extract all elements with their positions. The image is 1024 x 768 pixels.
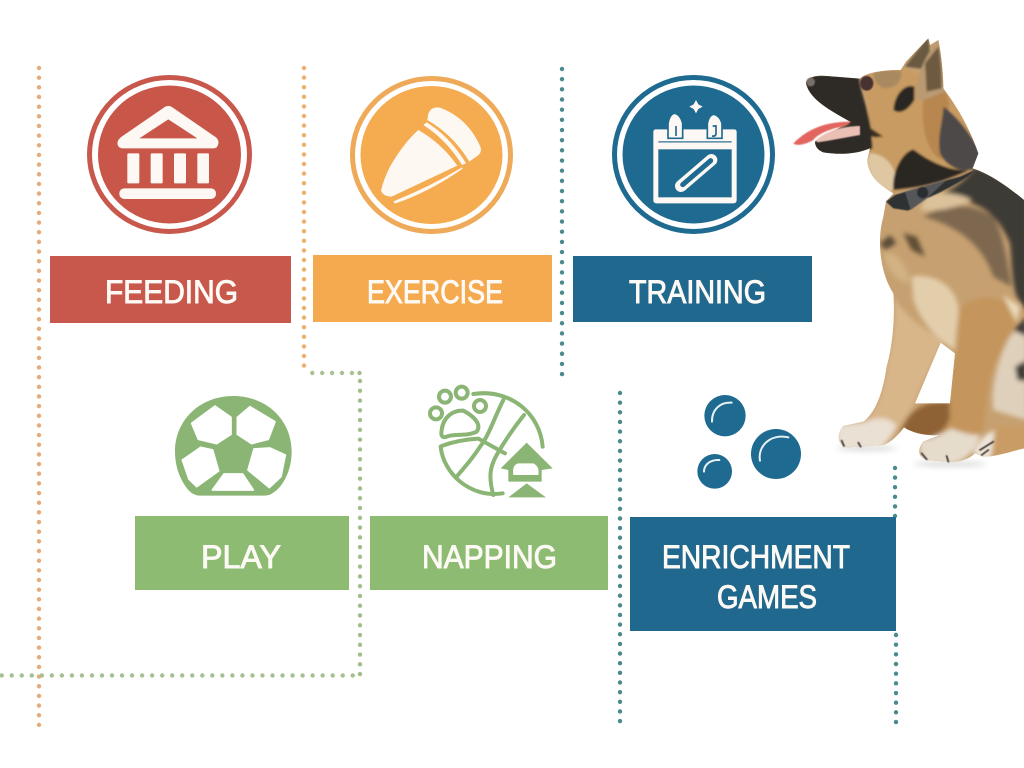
panel: enrichment games label: GAMES — [717, 579, 817, 615]
panel: napping label: NAPPING — [422, 539, 557, 575]
panel: training label: TRAINING — [629, 274, 766, 310]
panel: exercise label — [313, 255, 552, 322]
icon: exercise wedge badge — [352, 78, 510, 232]
panel: play label: PLAY — [201, 539, 281, 575]
panel: enrichment games label — [630, 517, 896, 631]
icon: training calendar badge — [614, 78, 772, 232]
icon: play soccer ball — [175, 396, 292, 496]
panel: feeding label — [50, 256, 291, 323]
panel: napping label — [370, 516, 608, 590]
icon: feeding temple badge — [90, 78, 250, 232]
dotted connector lines — [2, 68, 896, 726]
panel: feeding label: FEEDING — [105, 274, 238, 310]
panel: exercise label: EXERCISE — [367, 274, 503, 310]
icon: napping paw, ball and kennel — [430, 387, 553, 497]
illustration: German shepherd puppy — [793, 38, 1024, 469]
panel: play label — [135, 516, 349, 590]
icon: enrichment bubbles — [697, 395, 801, 489]
panel: enrichment games label: ENRICHMENT — [662, 539, 850, 575]
panel: training label — [573, 256, 812, 322]
